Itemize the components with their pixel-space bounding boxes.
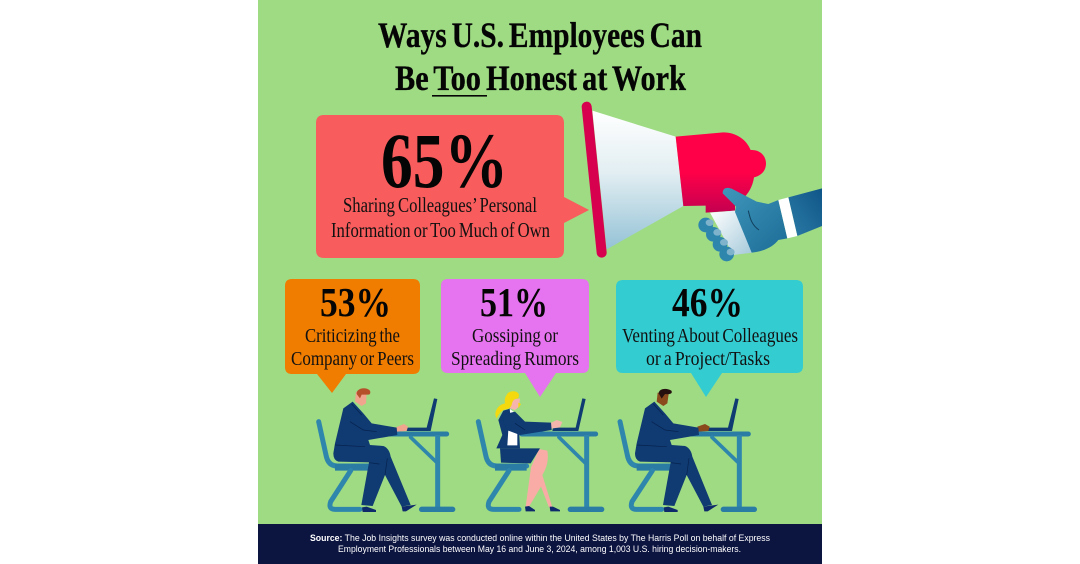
panel: 51 percent callout: 51%: [480, 279, 548, 325]
panel: 53 percent callout: Criticizing the: [305, 325, 400, 347]
title: [378, 15, 702, 98]
panel: 65 percent callout: Information or Too Much of Own: [331, 218, 550, 242]
icon: hand holding megaphone: [698, 188, 822, 261]
panel: 53 percent callout: Company or Peers: [291, 348, 414, 370]
megaphone: [587, 107, 766, 253]
panel: 51 percent callout: [441, 279, 589, 397]
panel: 46 percent callout: 46%: [672, 279, 743, 325]
panel: 46 percent callout: Venting About Colleagues: [622, 325, 798, 347]
panel: 53 percent callout: [285, 279, 420, 393]
title: Be Too Honest at Work: [395, 58, 686, 98]
panel: 51 percent callout: Spreading Rumors: [451, 348, 579, 370]
title: Ways U.S. Employees Can: [378, 15, 702, 55]
illustration: woman at desk with laptop: [478, 391, 602, 511]
footer source note: Employment Professionals between May 16 and June 3, 2024, among 1,003 U.S. hiring decision-makers.: [338, 544, 741, 555]
footer source note: Source: The Job Insights survey was conducted online within the United States by The Harris Poll on behalf of Express: [310, 533, 770, 544]
panel: 65 percent callout: Sharing Colleagues’ Personal: [343, 193, 537, 217]
footer source note: [258, 524, 822, 564]
panel: 65 percent callout: [316, 115, 589, 258]
panel: 46 percent callout: or a Project/Tasks: [646, 348, 770, 370]
panel: 51 percent callout: Gossiping or: [472, 325, 558, 347]
illustration: man at desk with laptop: [319, 388, 453, 512]
illustration: second man at desk with laptop: [620, 389, 754, 512]
panel: 46 percent callout: [616, 279, 803, 397]
panel: 53 percent callout: 53%: [320, 279, 391, 325]
panel: 65 percent callout: 65%: [381, 117, 508, 204]
background panel: [258, 0, 822, 564]
